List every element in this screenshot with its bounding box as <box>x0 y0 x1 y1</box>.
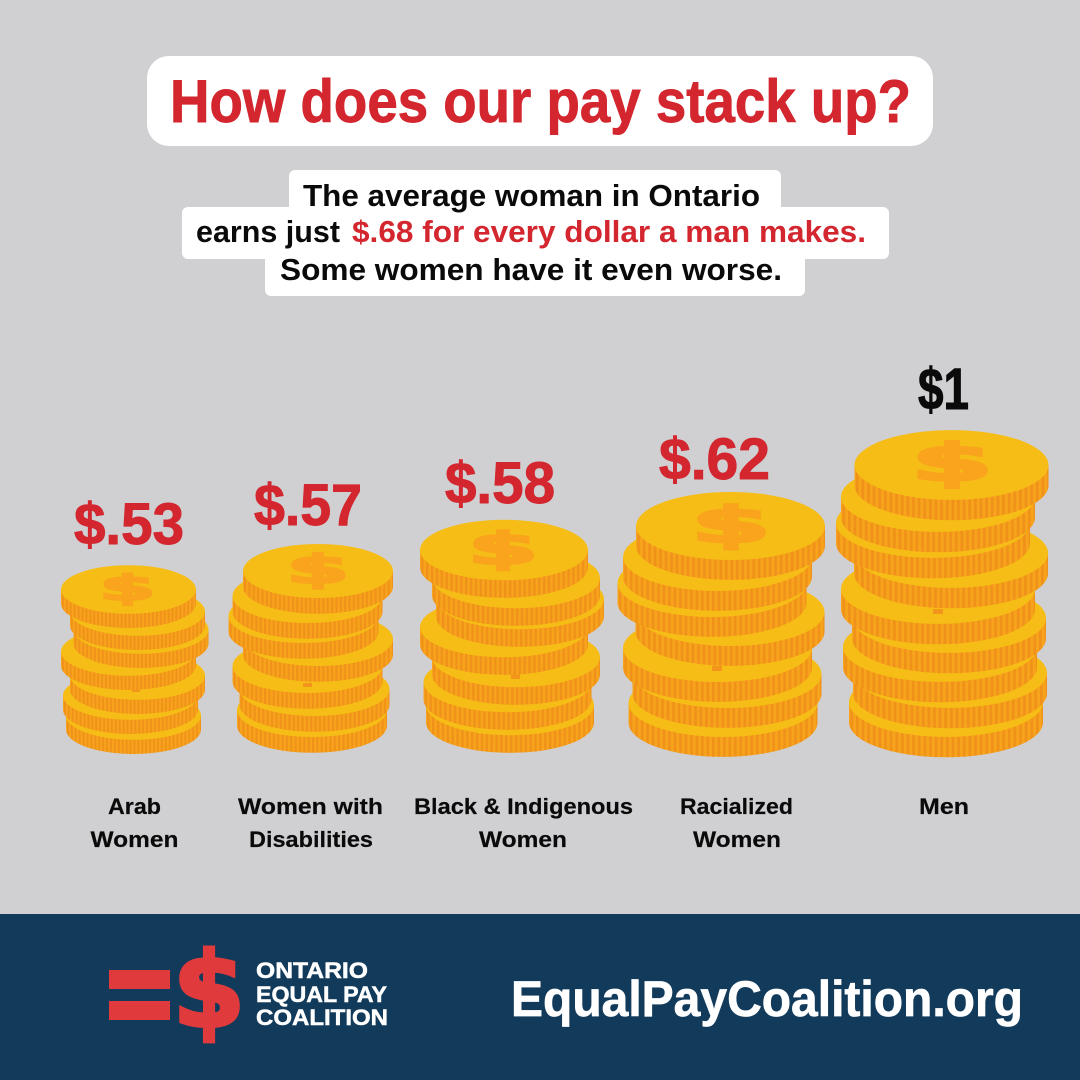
chart column: Racialized Women <box>618 427 825 852</box>
subtitle text block: earns just <box>196 214 340 249</box>
chart column: Racialized Women: Racialized <box>680 794 793 819</box>
chart column: Racialized Women: Women <box>693 827 781 852</box>
chart column: Arab Women: $.53 <box>74 492 184 557</box>
chart column: Men: $1 <box>918 357 969 422</box>
chart column: Women with Disabilities <box>228 473 393 852</box>
chart column: Women with Disabilities: Women with <box>238 794 383 819</box>
subtitle text block: $.68 for every dollar a man makes. <box>352 214 866 249</box>
website URL: EqualPayCoalition.org <box>511 971 1023 1027</box>
subtitle text block: Some women have it even worse. <box>280 252 782 287</box>
footer band <box>0 914 1080 1080</box>
chart column: Arab Women <box>61 492 208 852</box>
title: How does our pay stack up? <box>170 68 911 135</box>
chart column: Women with Disabilities: $.57 <box>254 473 362 538</box>
chart column: Men: Men <box>919 794 969 819</box>
title <box>147 56 933 146</box>
chart column: Black & Indigenous Women: Women <box>479 827 567 852</box>
chart column: Men <box>836 357 1048 819</box>
chart column: Racialized Women: $.62 <box>659 427 770 492</box>
chart column: Black & Indigenous Women: Black & Indigenous <box>414 794 633 819</box>
chart column: Arab Women: Women <box>90 827 178 852</box>
logo: Ontario Equal Pay Coalition: ONTARIO <box>256 958 368 983</box>
logo: Ontario Equal Pay Coalition: COALITION <box>256 1005 388 1030</box>
logo: Ontario Equal Pay Coalition <box>109 931 388 1051</box>
subtitle text block: The average woman in Ontario <box>303 178 760 213</box>
chart column: Women with Disabilities: Disabilities <box>249 827 373 852</box>
chart column: Black & Indigenous Women <box>414 451 633 852</box>
logo: Ontario Equal Pay Coalition: $ <box>173 931 245 1051</box>
chart column: Black & Indigenous Women: $.58 <box>445 451 555 516</box>
chart column: Arab Women: Arab <box>108 794 161 819</box>
logo: Ontario Equal Pay Coalition: EQUAL PAY <box>256 982 387 1007</box>
subtitle text block <box>182 170 889 296</box>
